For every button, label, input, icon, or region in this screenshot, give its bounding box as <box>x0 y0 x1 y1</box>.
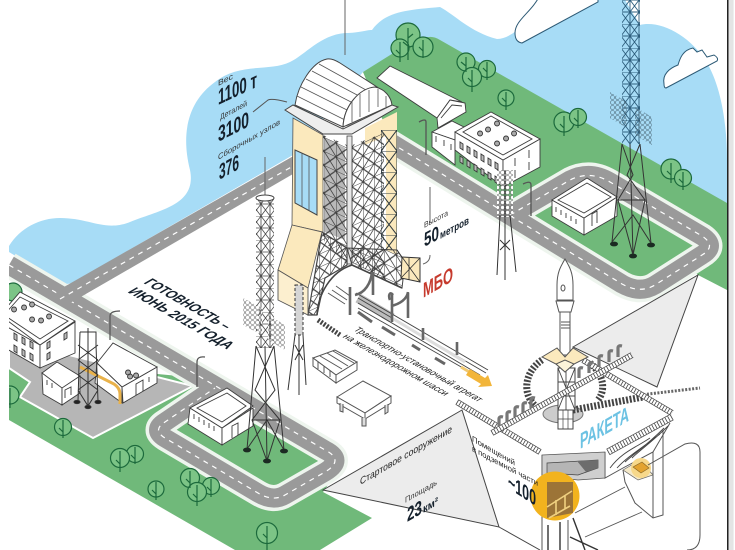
label: area: Площадь <box>405 477 437 505</box>
wall front <box>542 440 663 550</box>
MBO box bracing <box>397 250 420 282</box>
rocket <box>556 259 574 355</box>
central column <box>347 136 352 264</box>
starting structure panel <box>323 410 499 527</box>
building: large left block <box>0 292 75 368</box>
window mullions <box>302 153 309 211</box>
label: starting structure: Стартовое сооружение <box>360 424 452 488</box>
left tall floodlight tower <box>243 195 288 463</box>
label: parts: Деталей <box>220 98 247 122</box>
building: low block with pipe <box>95 343 157 403</box>
lattice right face <box>352 133 384 280</box>
short lattice tower near crawler <box>288 285 306 395</box>
street lamp left <box>110 311 120 340</box>
glow right <box>631 458 651 478</box>
room lines <box>547 491 572 518</box>
underground rooms <box>547 482 573 518</box>
cream wall flare <box>278 225 322 288</box>
building: office upper right <box>432 112 540 187</box>
label: MBO: МБО <box>423 261 453 303</box>
arch ribs <box>352 89 386 122</box>
short tower beside office <box>497 170 516 280</box>
roof eaves <box>285 105 398 134</box>
parking lot <box>9 352 192 440</box>
orange pipe <box>80 367 120 404</box>
frame shadow right <box>729 0 734 550</box>
rail cross beam <box>492 355 632 433</box>
label: assembly units: Сборочных узлов <box>218 117 280 162</box>
leader line top <box>344 0 346 55</box>
open shelter <box>337 381 391 426</box>
value: parts: 3100 <box>218 106 249 147</box>
recess window dark part <box>577 460 598 472</box>
cream wall base <box>278 270 308 315</box>
launch structure connecting panel <box>573 275 698 387</box>
label: readiness line two: ИЮНЬ 2015 ГОДА <box>124 286 238 352</box>
value: height number: 50 <box>424 221 439 252</box>
lattice lower right band <box>347 248 405 288</box>
value: height unit: метров <box>440 214 469 242</box>
cable fringe <box>610 426 668 468</box>
label: height: Высота <box>424 208 448 230</box>
street lamp rear <box>419 120 426 155</box>
green ground: upper right <box>363 37 727 290</box>
service arm teeth <box>499 346 622 426</box>
building: lower loop pavilion <box>188 388 253 445</box>
tall floodlight tower right <box>610 0 655 258</box>
road: north-east straight <box>60 125 365 299</box>
rail left front <box>457 402 540 452</box>
window <box>295 150 317 215</box>
label: transporter line two: на железнодорожном шасси <box>339 333 452 397</box>
lower arch opening <box>317 265 402 315</box>
leader line over lattice tower <box>264 157 266 194</box>
cream wall upper <box>292 118 323 232</box>
value: rooms: ~100 <box>508 469 536 511</box>
railcar block <box>313 350 357 383</box>
label: readiness line one: ГОТОВНОСТЬ – <box>140 277 236 332</box>
cloud right <box>664 48 718 88</box>
leader line to tower <box>253 99 287 112</box>
roof barrel <box>295 59 377 127</box>
roof front arch <box>343 87 392 127</box>
top surface <box>462 355 672 455</box>
value: assembly units: 376 <box>219 150 239 186</box>
white bed behind all lattice <box>323 121 386 158</box>
wall outlines <box>542 423 670 550</box>
launch deck <box>542 348 588 372</box>
launch structure truss and service arms <box>527 360 700 429</box>
recess <box>542 452 605 480</box>
lattice far-right column <box>381 130 397 250</box>
road: lower loop <box>9 265 335 498</box>
orange cube <box>633 462 649 473</box>
main service tower <box>278 59 420 335</box>
leader line height <box>423 187 430 264</box>
label: transporter line one: Транспортно-установочный агрегат <box>350 326 486 404</box>
label: rooms line one: Помещений <box>472 434 515 468</box>
rail rear <box>583 360 672 413</box>
value: weight: 1100 т <box>218 67 257 110</box>
building: shed behind tower <box>377 66 466 128</box>
MBO box <box>401 257 420 282</box>
roof ribs <box>297 64 366 120</box>
road: right loop <box>365 127 710 289</box>
street lamp center <box>197 357 205 387</box>
label: rocket: РАКЕТА <box>580 401 629 455</box>
green ground: lower left <box>9 360 372 550</box>
gray back of lattice <box>325 138 345 240</box>
label: weight: Вес <box>218 71 233 88</box>
building: small front block <box>42 362 80 405</box>
truss legs below <box>548 518 598 550</box>
building: right loop pavilion <box>552 178 617 235</box>
lattice left face <box>323 135 347 265</box>
glow left <box>530 472 580 520</box>
value: area number: 23 <box>407 495 422 527</box>
small pylon left <box>74 328 101 409</box>
rail right front <box>608 417 672 452</box>
panel bottom pointer <box>499 527 540 550</box>
cloud top <box>515 0 598 43</box>
lattice lower left leg <box>308 232 347 315</box>
white launch pad surface <box>86 174 292 294</box>
frame line right <box>727 0 729 550</box>
label: rooms line two: в подземной части <box>472 444 538 488</box>
launch pad block <box>462 355 672 550</box>
callout line to cube <box>648 443 700 550</box>
street lamp right <box>523 182 531 216</box>
transporter-erector on rails <box>328 272 488 383</box>
sky blob <box>9 0 727 284</box>
recess window light part <box>547 460 598 475</box>
value: area unit: км² <box>423 494 438 516</box>
cream right strip <box>365 112 397 255</box>
alcove plate <box>623 460 653 480</box>
orange direction arrow <box>466 369 492 387</box>
base bogies <box>318 320 340 335</box>
tunnel lines <box>575 487 642 537</box>
